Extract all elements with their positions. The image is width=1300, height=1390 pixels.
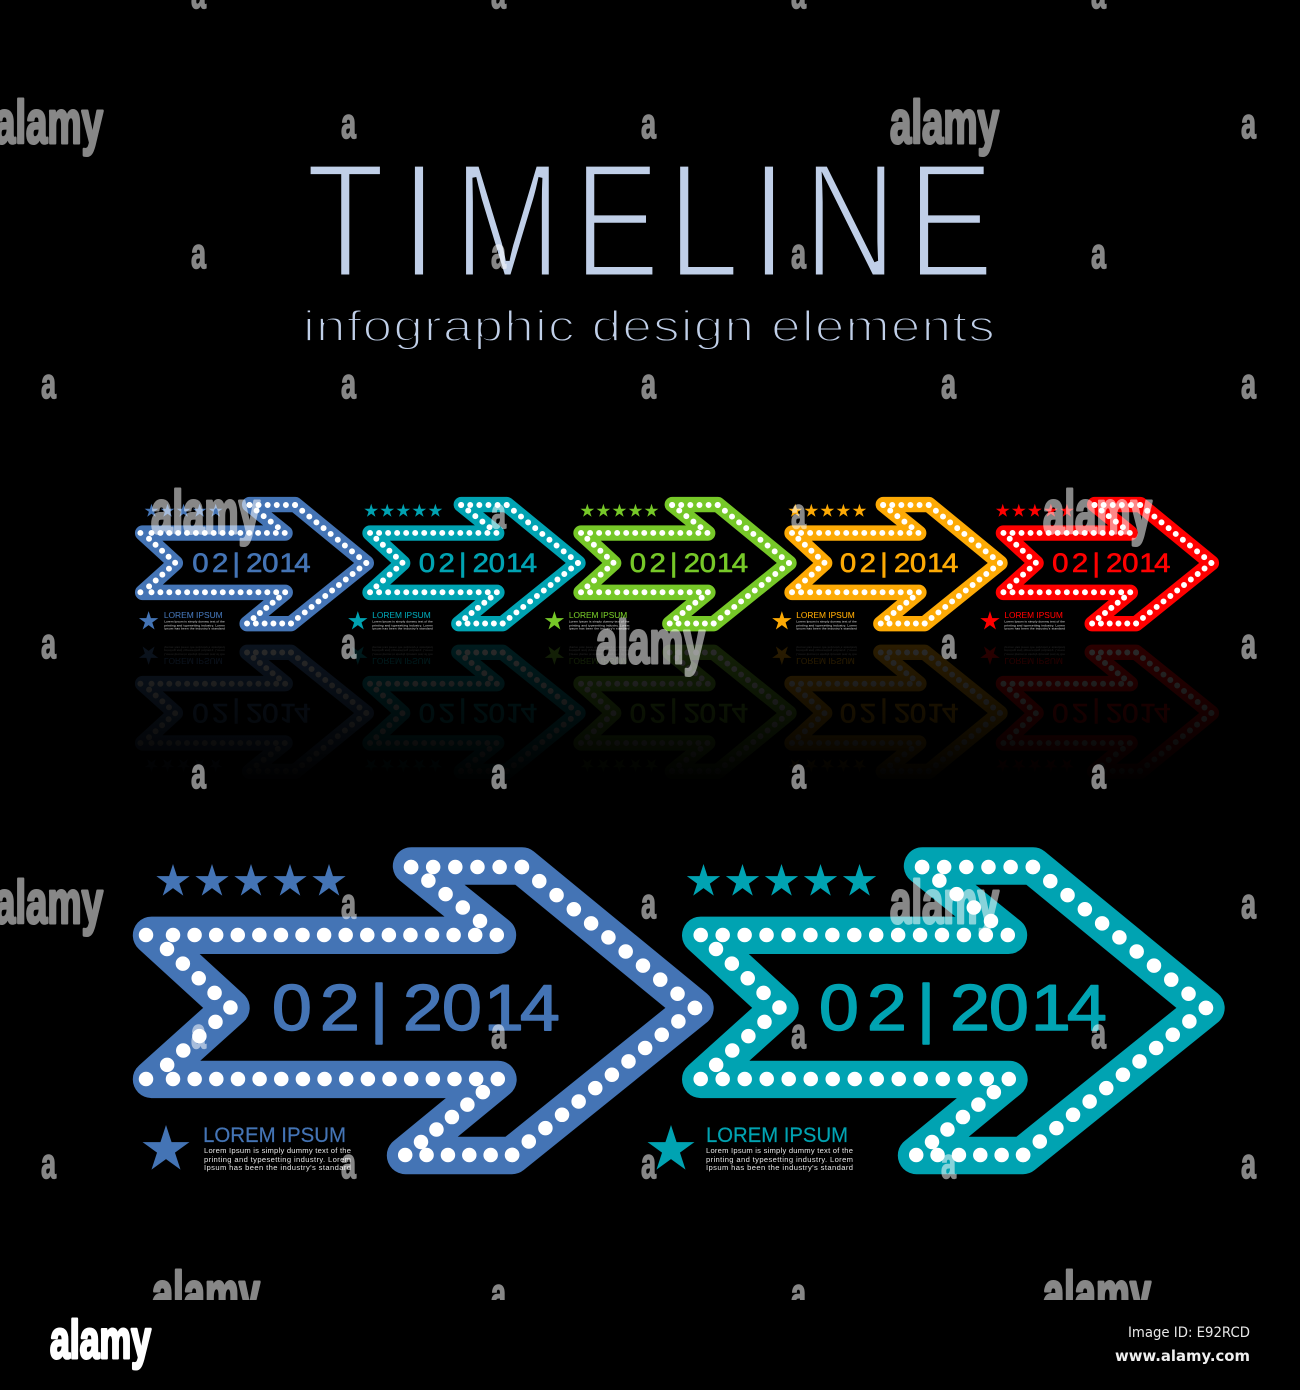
small timeline row	[139, 504, 1211, 631]
small arrow: teal: LOREM IPSUM	[372, 610, 431, 620]
watermark layer: a	[941, 1140, 957, 1188]
blue date: 02|2014	[272, 972, 560, 1044]
watermark layer: a	[941, 360, 957, 408]
website: www.alamy.com	[1115, 1347, 1250, 1365]
watermark layer: a	[191, 1010, 207, 1058]
small arrow: red: LOREM IPSUM	[1004, 610, 1063, 620]
watermark layer: a	[41, 620, 57, 668]
large arrow: teal	[648, 864, 1206, 1172]
teal arrow band with dots	[701, 866, 1206, 1156]
watermark layer: a	[641, 880, 657, 928]
small arrow: orange: Ipsum has been the industry's standard	[796, 627, 857, 631]
watermark layer: a	[641, 1140, 657, 1188]
watermark layer: a	[491, 750, 507, 798]
teal date: 02|2014	[819, 972, 1107, 1044]
small arrow: orange: 02|2014	[840, 548, 958, 578]
small arrow: green: Lorem Ipsum is simply dummy text of the	[569, 620, 630, 624]
watermark layer: a	[341, 880, 357, 928]
watermark layer: a	[1241, 1140, 1257, 1188]
watermark layer: a	[341, 620, 357, 668]
watermark layer: alamy	[890, 89, 999, 156]
watermark layer: a	[191, 230, 207, 278]
small arrow: red: 02|2014	[1052, 548, 1171, 578]
small arrow: red: printing and typesetting industry. Lorem	[1004, 623, 1065, 627]
watermark layer: a	[941, 620, 957, 668]
reflection of small timeline	[139, 645, 1211, 772]
small arrow: blue: Lorem Ipsum is simply dummy text of the	[164, 620, 225, 624]
watermark layer: a	[641, 100, 657, 148]
footer band	[0, 1300, 1300, 1390]
large arrow: blue	[143, 864, 695, 1172]
blue caption: printing and typesetting industry. Lorem	[204, 1155, 351, 1164]
small arrow: blue	[139, 504, 366, 631]
watermark layer: a	[341, 360, 357, 408]
small arrow: red: Lorem Ipsum is simply dummy text of the	[1004, 620, 1065, 624]
small arrow: red: Ipsum has been the industry's standard	[1004, 627, 1065, 631]
blue star icon	[143, 1125, 189, 1170]
small arrow: teal: Lorem Ipsum is simply dummy text of the	[372, 620, 433, 624]
watermark layer: a	[191, 750, 207, 798]
watermark layer: alamy	[151, 479, 260, 546]
small arrow: blue: 02|2014	[192, 548, 311, 578]
small arrow: orange: printing and typesetting industry. Lorem	[796, 623, 857, 627]
small arrow: green: printing and typesetting industry. Lorem	[569, 623, 630, 627]
watermark layer: a	[791, 1270, 807, 1318]
teal caption: LOREM IPSUM	[706, 1124, 848, 1147]
teal caption	[706, 1124, 853, 1172]
subtitle: infographic design elements	[303, 302, 996, 351]
watermark layer: alamy	[890, 869, 999, 936]
teal caption: Lorem Ipsum is simply dummy text of the	[706, 1146, 853, 1155]
watermark layer: a	[491, 1270, 507, 1318]
watermark layer: a	[1091, 230, 1107, 278]
small arrow: blue: LOREM IPSUM	[164, 610, 223, 620]
watermark layer: a	[1241, 100, 1257, 148]
small arrow: green: Ipsum has been the industry's standard	[569, 627, 630, 631]
watermark layer: alamy	[596, 609, 705, 676]
small arrow: orange: LOREM IPSUM	[796, 610, 855, 620]
blue caption: LOREM IPSUM	[203, 1124, 346, 1147]
blue caption: Ipsum has been the industry's standard	[204, 1163, 351, 1172]
small arrow: teal: Ipsum has been the industry's standard	[372, 627, 433, 631]
watermark layer: a	[41, 1140, 57, 1188]
watermark layer: alamy	[1043, 479, 1152, 546]
watermark layer: a	[341, 100, 357, 148]
watermark layer: a	[791, 230, 807, 278]
watermark layer: a	[791, 490, 807, 538]
watermark layer: a	[491, 1010, 507, 1058]
small arrow: teal: printing and typesetting industry. Lorem	[372, 623, 433, 627]
small arrow: blue: printing and typesetting industry. Lorem	[164, 623, 225, 627]
watermark layer: a	[341, 1140, 357, 1188]
footer logo: alamy	[50, 1310, 151, 1370]
small arrow: green: LOREM IPSUM	[569, 610, 627, 620]
watermark layer: a	[1241, 360, 1257, 408]
small arrow: teal: 02|2014	[419, 548, 537, 578]
image id: Image ID: E92RCD	[1128, 1325, 1250, 1341]
watermark layer: a	[1091, 750, 1107, 798]
watermark layer: alamy	[152, 1260, 260, 1327]
small arrow: teal	[348, 504, 578, 631]
small arrow: blue: Ipsum has been the industry's standard	[164, 627, 225, 631]
blue arrow band with dots	[146, 866, 695, 1156]
watermark layer: a	[491, 230, 507, 278]
teal five stars	[687, 864, 876, 896]
watermark layer: a	[791, 1010, 807, 1058]
small arrow: red	[980, 504, 1211, 631]
small arrow: orange: Lorem Ipsum is simply dummy text of the	[796, 620, 857, 624]
blue caption	[203, 1124, 351, 1172]
watermark layer: a	[1241, 880, 1257, 928]
teal caption: printing and typesetting industry. Lorem	[706, 1155, 853, 1164]
watermark layer: a	[41, 360, 57, 408]
watermark layer: alamy	[1043, 1260, 1151, 1327]
blue five stars	[156, 864, 346, 896]
teal caption: Ipsum has been the industry's standard	[706, 1163, 853, 1172]
teal star icon	[648, 1125, 694, 1170]
small arrow: green: 02|2014	[630, 548, 748, 578]
blue caption: Lorem Ipsum is simply dummy text of the	[204, 1146, 351, 1155]
small arrow: green	[545, 504, 789, 631]
watermark layer: a	[791, 750, 807, 798]
watermark layer: a	[491, 490, 507, 538]
watermark layer: a	[641, 360, 657, 408]
watermark layer: a	[1091, 1010, 1107, 1058]
small arrow: orange	[772, 504, 1000, 631]
title: TIMELINE	[306, 129, 994, 313]
watermark layer: a	[1241, 620, 1257, 668]
